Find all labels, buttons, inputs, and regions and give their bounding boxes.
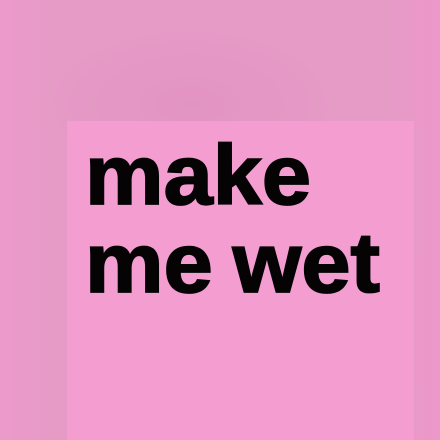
heading line: make: make (85, 128, 311, 222)
heading line: me wet: me wet (85, 216, 380, 310)
panel: pink square (67, 121, 414, 440)
